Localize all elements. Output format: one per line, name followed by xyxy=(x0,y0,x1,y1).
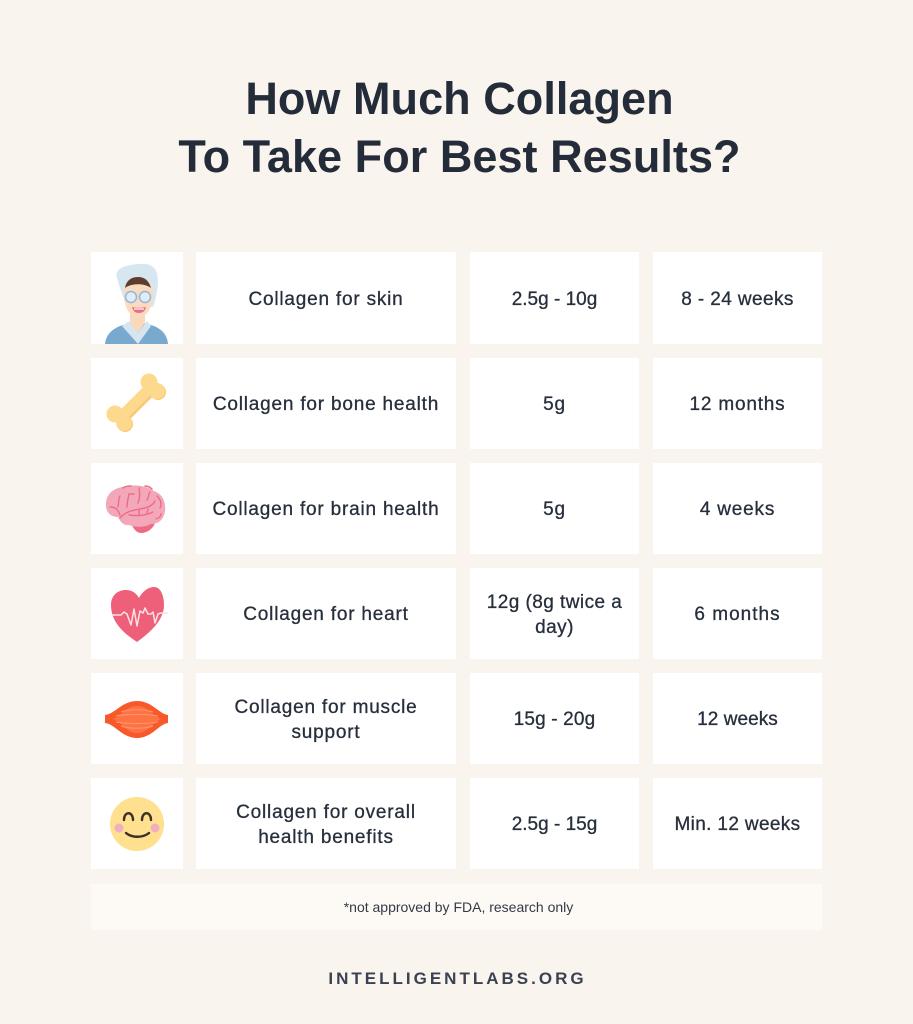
duration xyxy=(653,463,822,554)
label: support xyxy=(292,722,360,742)
dose xyxy=(470,778,639,869)
label: Collagen for bone health xyxy=(213,394,439,415)
label xyxy=(196,778,456,869)
row 1: skin xyxy=(91,252,822,344)
dose xyxy=(470,673,639,764)
label: Collagen for heart xyxy=(243,604,409,625)
footnote xyxy=(91,884,822,930)
duration xyxy=(653,358,822,449)
icon: muscle xyxy=(91,673,183,764)
icon: woman with face mask xyxy=(91,252,183,344)
label xyxy=(196,463,456,554)
duration: 12 months xyxy=(690,394,785,415)
title: To Take For Best Results? xyxy=(178,131,741,182)
icon: brain xyxy=(91,463,183,554)
label: health benefits xyxy=(258,826,394,848)
dose: day) xyxy=(535,616,574,638)
icon: bone xyxy=(91,358,183,449)
row 5: muscle xyxy=(91,673,822,764)
footnote: *not approved by FDA, research only xyxy=(344,899,573,915)
icon: smiley xyxy=(91,778,183,869)
dose: 2.5g - 10g xyxy=(512,288,597,310)
label xyxy=(196,568,456,659)
row 6: overall xyxy=(91,778,822,869)
duration: Min. 12 weeks xyxy=(674,814,800,835)
dose: 15g - 20g xyxy=(514,709,595,730)
duration: 12 weeks xyxy=(697,709,778,730)
dose xyxy=(470,463,639,554)
title: How Much Collagen xyxy=(245,73,674,124)
dose: 2.5g - 15g xyxy=(512,814,597,835)
label: Collagen for brain health xyxy=(212,499,440,520)
row 3: brain xyxy=(91,463,822,554)
label: Collagen for skin xyxy=(248,288,404,310)
label xyxy=(196,358,456,449)
label xyxy=(196,252,456,344)
title xyxy=(178,73,741,182)
duration: 4 weeks xyxy=(700,499,775,520)
dose: 5g xyxy=(543,394,566,415)
footer website: INTELLIGENTLABS.ORG xyxy=(328,969,587,988)
icon: heart with pulse xyxy=(91,568,183,659)
duration xyxy=(653,568,822,659)
dose: 5g xyxy=(543,499,566,520)
label: Collagen for overall xyxy=(236,802,416,822)
dose: 12g (8g twice a xyxy=(487,592,622,612)
duration xyxy=(653,252,822,344)
row 4: heart xyxy=(91,568,822,659)
row 2: bone xyxy=(91,358,822,449)
duration: 8 - 24 weeks xyxy=(681,288,794,310)
label: Collagen for muscle xyxy=(234,696,418,718)
dose xyxy=(470,358,639,449)
dose xyxy=(470,252,639,344)
label xyxy=(196,673,456,764)
duration xyxy=(653,778,822,869)
duration xyxy=(653,673,822,764)
dose xyxy=(470,568,639,659)
duration: 6 months xyxy=(694,604,781,625)
